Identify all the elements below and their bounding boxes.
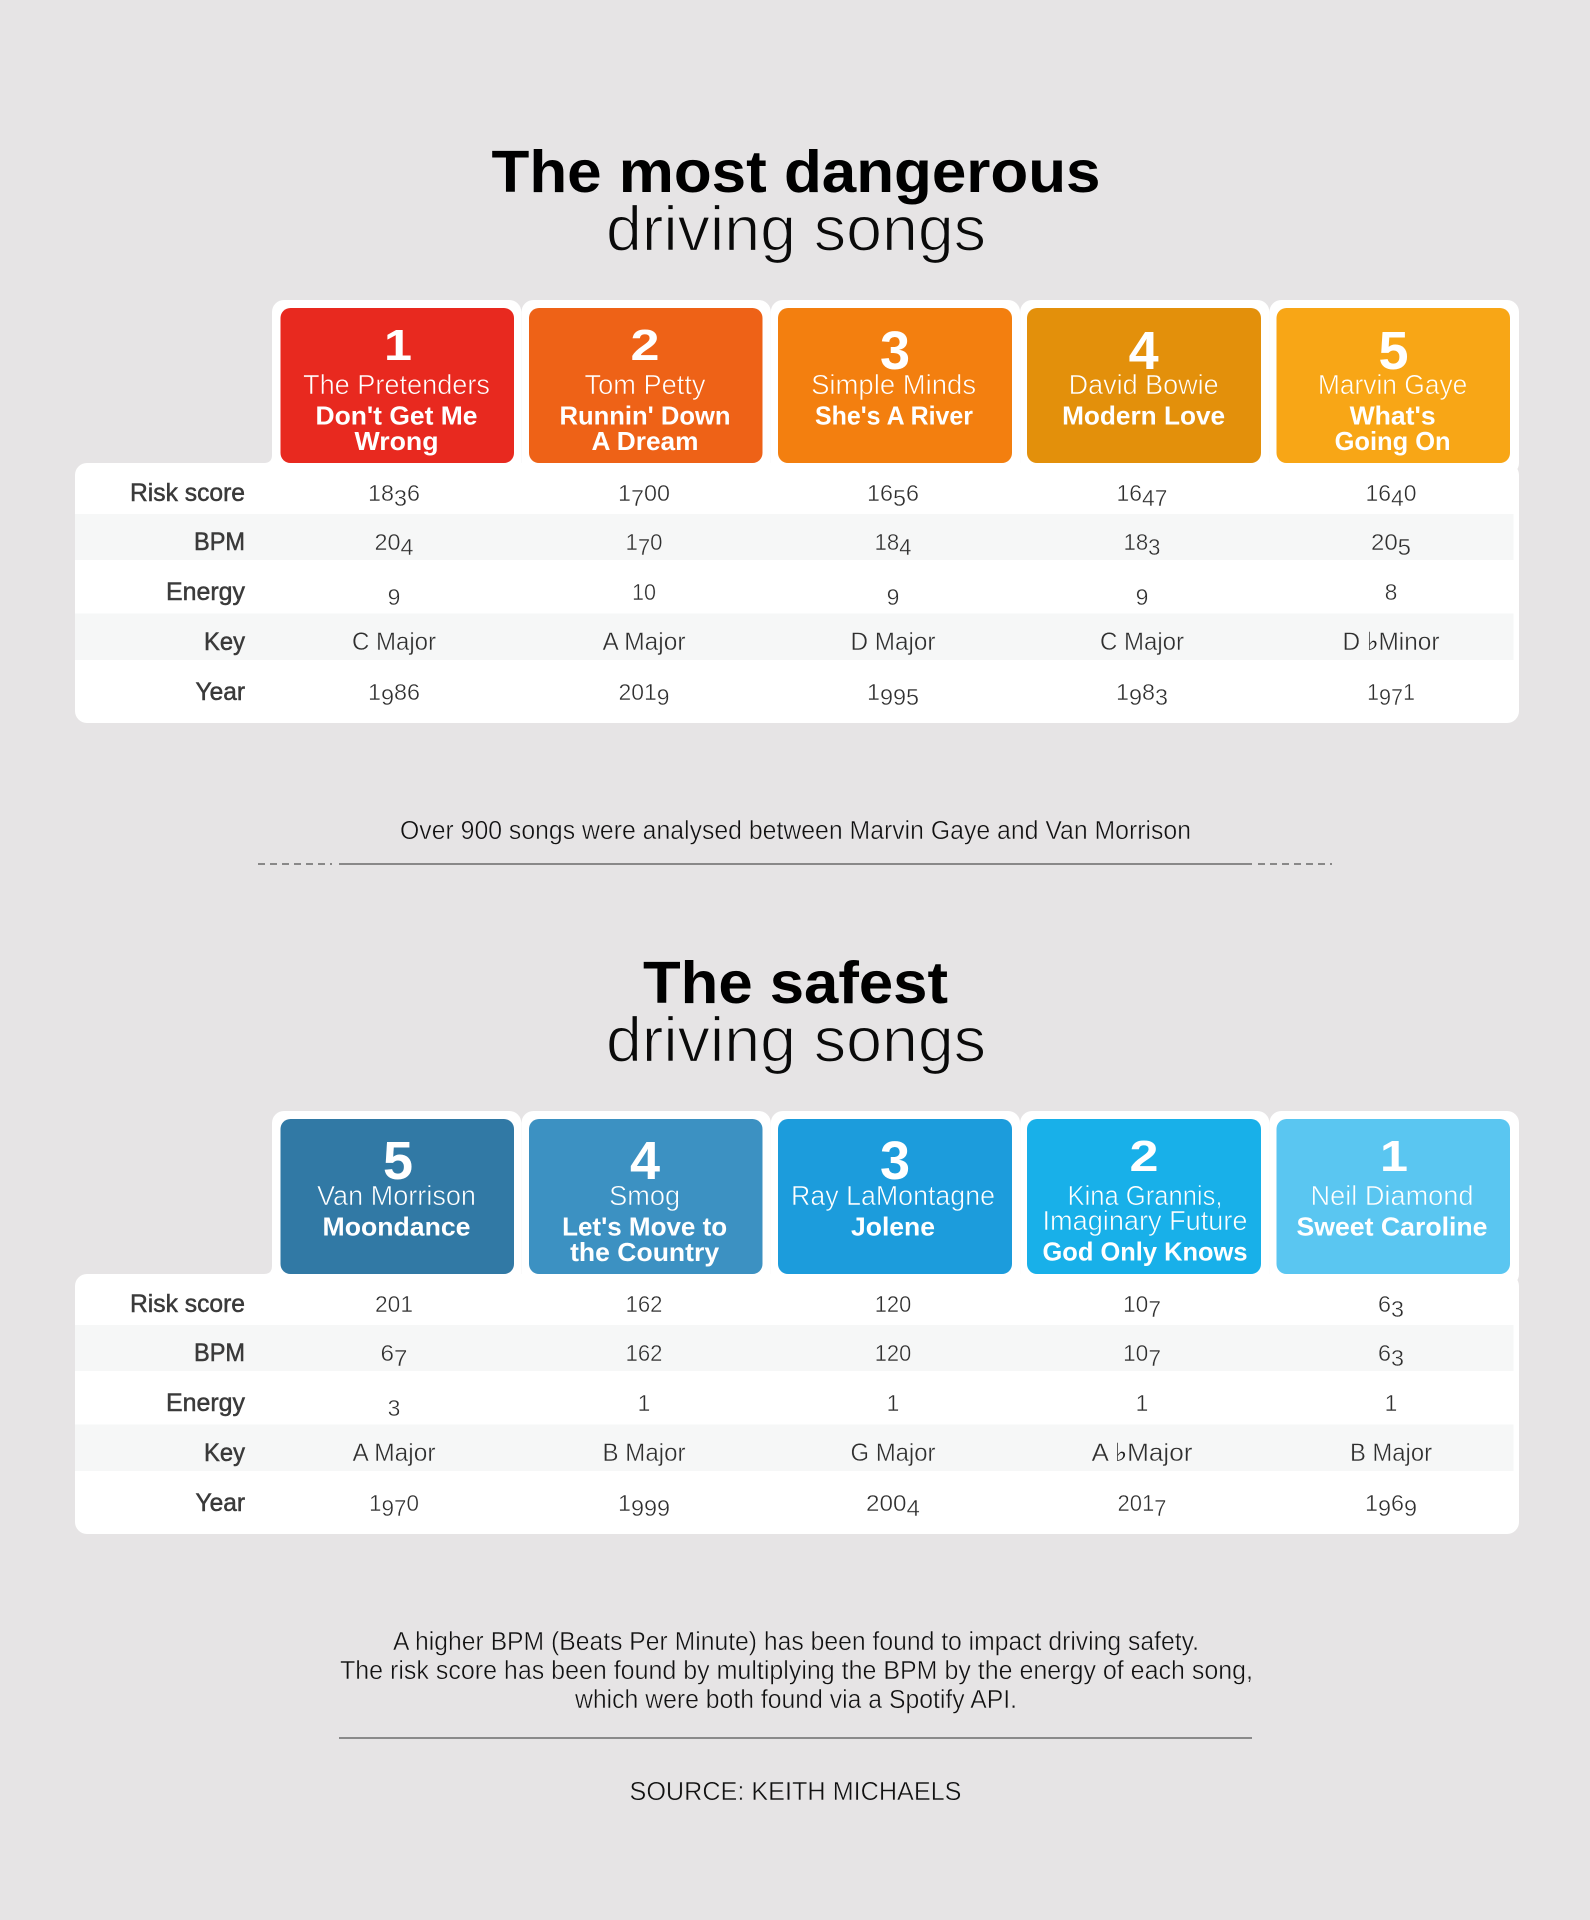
card: rank 2 Tom Petty: A Dream (592, 426, 698, 456)
row: Year: 1 (618, 1490, 631, 1516)
row: Year: 1 (1403, 679, 1415, 705)
panel: most dangerous songs table (75, 300, 1519, 723)
card: rank 3 Simple Minds: Simple Minds (811, 369, 976, 400)
card: rank 3 Ray LaMontagne (778, 1119, 1012, 1274)
row: Year: 1 (1365, 1490, 1378, 1516)
row: Year: 999 (631, 1495, 670, 1521)
row: BPM: 10 (1123, 1340, 1149, 1366)
row: Year (196, 678, 1415, 710)
card: rank 5 Van Morrison: 5 (383, 1131, 413, 1191)
card: rank 4 Smog: 4 (630, 1131, 660, 1191)
row: Risk score: 7 (1148, 1296, 1161, 1322)
row: Year (196, 1489, 1417, 1521)
card: rank 4 Smog: the Country (570, 1237, 720, 1267)
caption: songs analysed: Over 900 songs were analysed between Marvin Gaye and Van Morrison (400, 817, 1191, 845)
row: Year: 995 (880, 684, 919, 710)
row: Year: 1 (1367, 679, 1380, 705)
row: Year: Year (196, 678, 245, 706)
row: Key: D ♭Minor (1342, 628, 1440, 656)
row: Year: 8 (1142, 679, 1155, 705)
row: Energy: 1 (638, 1390, 650, 1416)
row: BPM: 7 (638, 534, 650, 560)
row: BPM: 1 (626, 529, 638, 555)
card: rank 2 Kina Grannis, Imaginary Future: Kina Grannis, (1068, 1180, 1222, 1211)
row: Key: Key (204, 1439, 245, 1467)
row: Risk score: 7 (631, 485, 644, 511)
row: Risk score: 3 (1391, 1296, 1404, 1322)
card: rank 4 Smog (529, 1119, 762, 1274)
row: Key: A Major (602, 628, 686, 656)
card: rank 4 David Bowie: Modern Love (1062, 400, 1225, 430)
title: most dangerous driving songs: The most dangerous (492, 139, 1100, 205)
text block: methodology note: A higher BPM (Beats Per Minute) has been found to impact driving safety. (393, 1628, 1199, 1656)
row: Year: 9 (1129, 684, 1142, 710)
row: Year: 1 (1116, 679, 1129, 705)
row: Risk score (130, 1290, 1404, 1322)
card: rank 5 Marvin Gaye (1276, 308, 1510, 463)
text block: methodology note (340, 1628, 1253, 1714)
row: Energy: Energy (166, 578, 245, 606)
row: Risk score: 00 (644, 480, 670, 506)
row: Key (204, 1439, 1432, 1467)
card: rank 3 Ray LaMontagne: Jolene (851, 1212, 935, 1242)
row: BPM (194, 528, 1411, 560)
row: Risk score: 6 (906, 480, 919, 506)
card: rank 4 David Bowie: 4 (1129, 321, 1159, 381)
row: Key: A Major (352, 1439, 436, 1467)
card: rank 1 The Pretenders: The Pretenders (303, 369, 490, 400)
row: BPM: 3 (1391, 1345, 1404, 1371)
card: rank 4 David Bowie: David Bowie (1069, 369, 1219, 400)
row: Energy: 8 (1385, 579, 1397, 605)
row: Energy (166, 578, 1397, 610)
row: BPM: 7 (1148, 1345, 1161, 1371)
card: rank 5 Van Morrison: Van Morrison (317, 1180, 476, 1211)
card: rank 5 Marvin Gaye: What's (1350, 400, 1436, 430)
row: Energy: 10 (632, 579, 656, 605)
row: BPM: 7 (394, 1345, 408, 1371)
row: BPM: 20 (374, 529, 400, 555)
card: rank 5 Van Morrison (280, 1119, 514, 1274)
card: rank 5 Marvin Gaye: Marvin Gaye (1318, 369, 1467, 400)
card: rank 2 Kina Grannis, Imaginary Future: Imaginary Future (1042, 1205, 1248, 1236)
card: rank 1 Neil Diamond (1276, 1119, 1510, 1274)
panel: safest songs table (75, 1111, 1519, 1534)
row: Year: 0 (406, 1490, 419, 1516)
row: BPM: 4 (400, 534, 414, 560)
row: Energy: 1 (1136, 1390, 1148, 1416)
row: Risk score: 16 (1366, 480, 1391, 506)
card: rank 3 Simple Minds (778, 308, 1012, 463)
row: Energy: 1 (1385, 1390, 1397, 1416)
card: rank 2 Tom Petty: 2 (630, 321, 660, 370)
row: BPM: 6 (1378, 1340, 1391, 1366)
card: rank 4 David Bowie (1027, 308, 1261, 463)
row: Risk score: 6 (1378, 1291, 1391, 1317)
table background (75, 300, 1519, 723)
row: Year: 1 (368, 679, 381, 705)
row: Key: A ♭Major (1092, 1439, 1192, 1467)
row: BPM: 0 (650, 529, 662, 555)
row: Risk score: 0 (1404, 480, 1416, 506)
row: Risk score: 18 (368, 480, 394, 506)
row: Key: B Major (602, 1439, 686, 1467)
row: BPM: 6 (380, 1340, 393, 1366)
row: BPM: BPM (194, 1339, 245, 1367)
card: rank 5 Marvin Gaye: 5 (1378, 321, 1409, 381)
row: Risk score: 10 (1123, 1291, 1149, 1317)
row: Year: 86 (394, 679, 420, 705)
row: Key: C Major (1100, 628, 1184, 656)
row: Key: Key (204, 628, 245, 656)
table background (75, 1111, 1519, 1534)
card: rank 1 The Pretenders: 1 (384, 321, 412, 370)
row: BPM: 20 (1371, 529, 1397, 555)
row: BPM: 4 (899, 534, 912, 560)
row: Key: D Major (850, 628, 936, 656)
card: rank 3 Ray LaMontagne: Ray LaMontagne (791, 1180, 995, 1211)
row: Risk score: 6 (407, 480, 420, 506)
row: Year: 201 (1118, 1490, 1156, 1516)
row: Year: 3 (1155, 684, 1168, 710)
card: rank 4 Smog: Let's Move to (562, 1212, 727, 1242)
row: Year: Year (196, 1489, 245, 1517)
row: Energy: 1 (887, 1390, 899, 1416)
row: Year: 6 (1391, 1490, 1404, 1516)
row: Year: 201 (618, 679, 657, 705)
card: rank 5 Van Morrison: Moondance (322, 1212, 470, 1242)
row: BPM: 162 (626, 1340, 662, 1366)
card: rank 2 Tom Petty (529, 308, 762, 463)
row: BPM: 18 (874, 529, 900, 555)
card: rank 1 Neil Diamond: 1 (1380, 1132, 1408, 1181)
row: Risk score: 1 (618, 480, 631, 506)
row: BPM: 3 (1148, 534, 1160, 560)
row: Energy: 9 (1136, 584, 1148, 610)
row: Year: 9 (1378, 1495, 1391, 1521)
card: rank 2 Tom Petty: Runnin' Down (560, 400, 730, 430)
card: rank 5 Marvin Gaye: Going On (1335, 426, 1451, 456)
row: Year: 9 (1404, 1495, 1417, 1521)
title: most dangerous driving songs (492, 139, 1100, 264)
row: Energy: Energy (166, 1389, 245, 1417)
row: BPM: BPM (194, 528, 245, 556)
title: safest driving songs: The safest (643, 950, 948, 1016)
row: Year: 4 (906, 1495, 920, 1521)
row: Risk score: 120 (875, 1291, 911, 1317)
card: rank 2 Kina Grannis, Imaginary Future (1027, 1119, 1261, 1274)
title: safest driving songs (606, 950, 986, 1076)
row: Year: 9 (381, 684, 394, 710)
card: rank 2 Kina Grannis, Imaginary Future: 2 (1130, 1132, 1158, 1181)
row: Risk score: 16 (1116, 480, 1142, 506)
row: Energy: 9 (388, 584, 400, 610)
source credit: SOURCE: KEITH MICHAELS (630, 1778, 962, 1806)
row: Energy (166, 1389, 1397, 1421)
row: BPM: 120 (875, 1340, 911, 1366)
row: Risk score: Risk score (130, 1290, 245, 1318)
row: Risk score: 47 (1142, 485, 1168, 511)
title: most dangerous driving songs: driving songs (606, 194, 986, 264)
row: Risk score: 3 (394, 485, 407, 511)
card: rank 3 Simple Minds: 3 (880, 321, 910, 381)
row: Year: 200 (866, 1490, 904, 1516)
row: BPM (194, 1339, 1404, 1371)
row: Risk score: 4 (1391, 485, 1404, 511)
card: rank 3 Ray LaMontagne: 3 (880, 1131, 910, 1191)
row: Year: 97 (1379, 684, 1403, 710)
row: Risk score: 201 (375, 1291, 413, 1317)
row: Year: 1 (867, 679, 880, 705)
title: safest driving songs: driving songs (606, 1006, 986, 1076)
card: rank 2 Tom Petty: Tom Petty (584, 369, 706, 400)
row: Year: 7 (1154, 1495, 1166, 1521)
text block: methodology note: The risk score has been found by multiplying the BPM by the energy of each song, (340, 1657, 1253, 1685)
text block: methodology note: which were both found via a Spotify API. (574, 1686, 1017, 1714)
card: rank 1 The Pretenders: Wrong (354, 426, 438, 456)
row: Energy: 9 (887, 584, 899, 610)
row: Risk score: 16 (867, 480, 893, 506)
row: Year: 1 (369, 1490, 382, 1516)
row: Year: 97 (382, 1495, 406, 1521)
row: Risk score: 5 (893, 485, 906, 511)
row: Key: B Major (1350, 1439, 1432, 1467)
card: rank 1 The Pretenders (280, 308, 514, 463)
card: rank 3 Simple Minds: She's A River (815, 400, 973, 430)
row: Energy: 3 (388, 1395, 400, 1421)
row: Risk score: 162 (626, 1291, 662, 1317)
row: BPM: 18 (1124, 529, 1149, 555)
row: BPM: 5 (1398, 534, 1411, 560)
row: Key (204, 628, 1440, 656)
row: Key: C Major (352, 628, 436, 656)
card: rank 4 Smog: Smog (609, 1180, 680, 1211)
card: rank 1 Neil Diamond: Sweet Caroline (1296, 1212, 1488, 1242)
card: rank 1 Neil Diamond: Neil Diamond (1310, 1180, 1474, 1211)
row: Risk score (130, 479, 1416, 511)
row: Year: 9 (657, 684, 670, 710)
card: rank 1 The Pretenders: Don't Get Me (316, 400, 478, 430)
row: Risk score: Risk score (130, 479, 245, 507)
row: Key: G Major (850, 1439, 936, 1467)
card: rank 2 Kina Grannis, Imaginary Future: God Only Knows (1042, 1236, 1248, 1266)
